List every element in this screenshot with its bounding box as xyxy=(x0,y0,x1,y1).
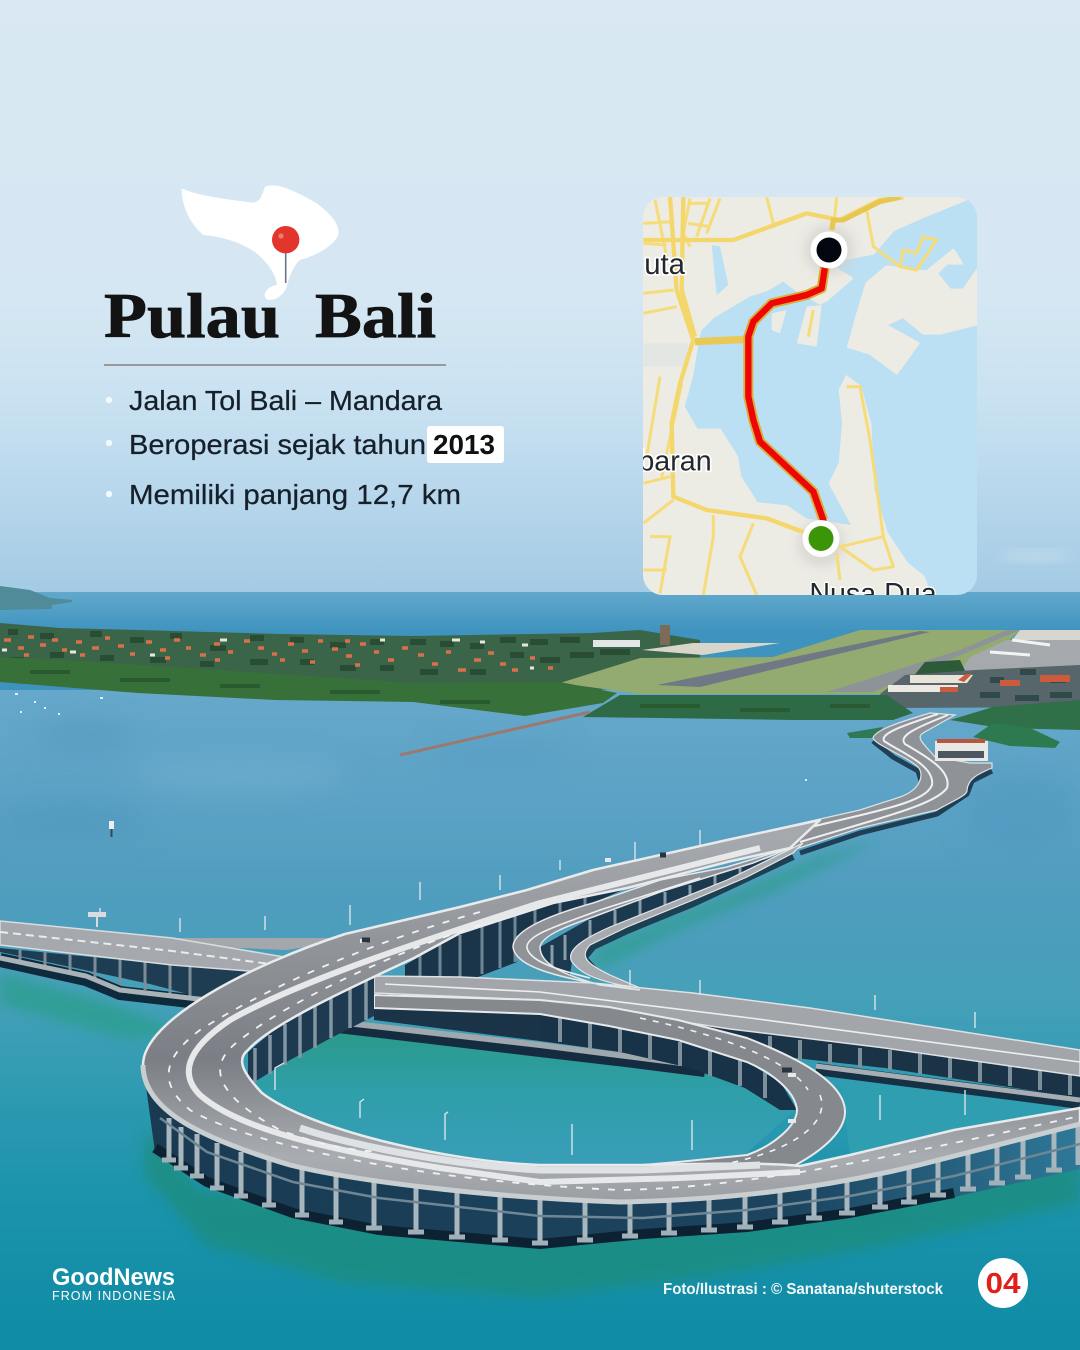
pier columns xyxy=(169,1118,1078,1243)
pier in water xyxy=(400,712,590,755)
bullet dot 1 xyxy=(106,397,112,403)
upper road supports xyxy=(405,888,627,990)
gold main road top xyxy=(832,197,900,230)
airport link road xyxy=(695,339,747,342)
map label Jimbaran: baran xyxy=(638,446,712,478)
pin highlight xyxy=(278,233,284,239)
ramp outer underside xyxy=(583,856,793,977)
runway xyxy=(657,631,930,687)
terminal trees xyxy=(913,660,968,677)
terminal apron xyxy=(960,640,1080,672)
left branch columns xyxy=(20,950,190,996)
harbour piers xyxy=(772,305,822,347)
map label Kuta: uta xyxy=(644,248,686,281)
left branch lanes xyxy=(0,932,285,966)
parked planes xyxy=(990,640,1050,655)
far road to toll plaza xyxy=(727,713,992,850)
town dark blocks xyxy=(980,672,1072,698)
deck median xyxy=(189,848,800,1182)
straight road columns xyxy=(770,1036,1070,1095)
bottom concrete band xyxy=(300,1128,760,1170)
mangrove right xyxy=(950,700,1080,730)
water tone patches xyxy=(0,723,1080,850)
ramp B deck xyxy=(571,843,803,988)
title: Bali xyxy=(315,280,436,351)
bullet dot 2 xyxy=(106,440,112,446)
near water xyxy=(0,690,1080,1350)
inner support wall left xyxy=(248,975,374,1086)
ramp support columns xyxy=(552,868,740,968)
map label Nusa Dua: Nusa Dua xyxy=(809,577,937,610)
white roofs xyxy=(2,640,534,668)
creek inlet xyxy=(712,245,728,295)
upper support columns xyxy=(420,896,585,985)
logo wordmark: GoodNews xyxy=(52,1264,175,1291)
left branch supports xyxy=(0,948,290,1000)
photo credit: Foto/Ilustrasi : © Sanatana/shuterstock xyxy=(663,1281,943,1298)
lamp posts xyxy=(100,830,975,1155)
sky background xyxy=(0,0,1080,600)
distant headland xyxy=(0,586,72,610)
right service road xyxy=(816,1066,1080,1100)
minor roads xyxy=(643,197,937,595)
pin head xyxy=(272,226,299,253)
dark cars xyxy=(362,855,792,1070)
terminal roofs xyxy=(910,675,973,683)
left branch upper lane xyxy=(172,938,350,950)
water between roads right xyxy=(840,1075,1080,1155)
straight road lanes xyxy=(385,984,1080,1062)
navigation buoy xyxy=(109,821,114,837)
inner loop upper lane xyxy=(640,1018,808,1090)
end marker xyxy=(802,520,840,557)
inner loop centre line xyxy=(720,1095,822,1165)
inner loop deck xyxy=(374,995,845,1172)
bullet dot 3 xyxy=(106,491,112,497)
ramp A lane xyxy=(527,878,700,978)
inner service road xyxy=(338,1022,705,1066)
inner loop columns xyxy=(560,1018,765,1098)
pier shadow strip xyxy=(155,1148,954,1244)
far road underside xyxy=(800,741,992,853)
toll plaza xyxy=(935,739,988,761)
pin needle xyxy=(285,253,287,283)
right service road shadow xyxy=(816,1069,1080,1103)
shallow green water left xyxy=(0,973,180,1040)
sand apron xyxy=(642,643,780,655)
ramp A deck xyxy=(513,847,793,990)
cars xyxy=(360,860,796,1121)
Serangan island xyxy=(848,250,980,373)
small island right xyxy=(973,723,1060,748)
bullet text 3: Memiliki panjang 12,7 km xyxy=(129,479,461,510)
main pier base xyxy=(143,1065,1080,1248)
sign gantry xyxy=(88,912,106,927)
pier feet xyxy=(162,1160,1062,1243)
far road white lines xyxy=(790,714,948,842)
straight road deck xyxy=(374,976,1080,1076)
left service road shadow xyxy=(0,960,207,1003)
icon: Bali map with pin xyxy=(182,185,339,300)
bullet text 2: Beroperasi sejak tahun xyxy=(129,429,426,460)
airfield main grass xyxy=(560,630,1020,694)
far sea xyxy=(0,592,1080,702)
map water xyxy=(643,197,977,595)
small boats xyxy=(15,694,807,780)
faint cloud xyxy=(999,551,1071,561)
reflection under ramp xyxy=(585,840,880,975)
village trees xyxy=(8,632,630,672)
inner loop supports xyxy=(540,1014,797,1110)
route map xyxy=(638,190,980,610)
major roads xyxy=(643,197,903,533)
deck outer edge xyxy=(143,1065,1080,1202)
year highlight box xyxy=(427,426,504,463)
main loop deck xyxy=(143,820,1080,1202)
right town xyxy=(880,665,1080,708)
small islet xyxy=(847,727,883,738)
road B lane markings xyxy=(220,925,480,1152)
hangar xyxy=(593,640,640,647)
toll road structure xyxy=(0,713,1080,1248)
taxiway tarmac xyxy=(827,630,1020,692)
Bali island silhouette xyxy=(182,185,339,300)
title rule xyxy=(104,364,446,366)
page number badge xyxy=(978,1258,1028,1308)
map mainland xyxy=(640,190,968,603)
route underlay xyxy=(748,267,825,520)
inner support columns left xyxy=(255,978,366,1082)
ramp supports between lanes xyxy=(540,855,780,975)
title: Pulau xyxy=(104,280,280,351)
terrain shade near end marker xyxy=(798,520,844,567)
terrain shade near start marker xyxy=(804,225,854,275)
village roofs xyxy=(4,637,553,670)
logo subline: FROM INDONESIA xyxy=(52,1289,176,1303)
logo GoodNews from Indonesia xyxy=(52,1264,176,1303)
inner service road shadow xyxy=(338,1026,705,1070)
start marker xyxy=(810,232,848,268)
pier tie beam xyxy=(160,1118,1080,1218)
road A lane markings xyxy=(169,912,1080,1190)
bullet list xyxy=(106,385,504,510)
village land xyxy=(0,623,700,700)
left branch deck xyxy=(0,921,345,975)
mangrove shading xyxy=(30,672,870,710)
water inside loop xyxy=(240,1030,795,1175)
coastline land and airport xyxy=(0,623,1080,748)
bullet text 1: Jalan Tol Bali – Mandara xyxy=(129,385,442,416)
page number badge: 04 xyxy=(986,1268,1020,1300)
control tower xyxy=(660,625,670,645)
route line xyxy=(748,267,825,520)
year text: 2013 xyxy=(433,429,495,460)
top apron xyxy=(1012,630,1080,640)
mangrove centre xyxy=(583,695,913,720)
left service deck xyxy=(0,958,207,1000)
reflection under loop xyxy=(145,1130,1080,1297)
airport area xyxy=(643,343,688,367)
straight road supports xyxy=(374,993,1080,1098)
mangrove left xyxy=(0,657,617,716)
